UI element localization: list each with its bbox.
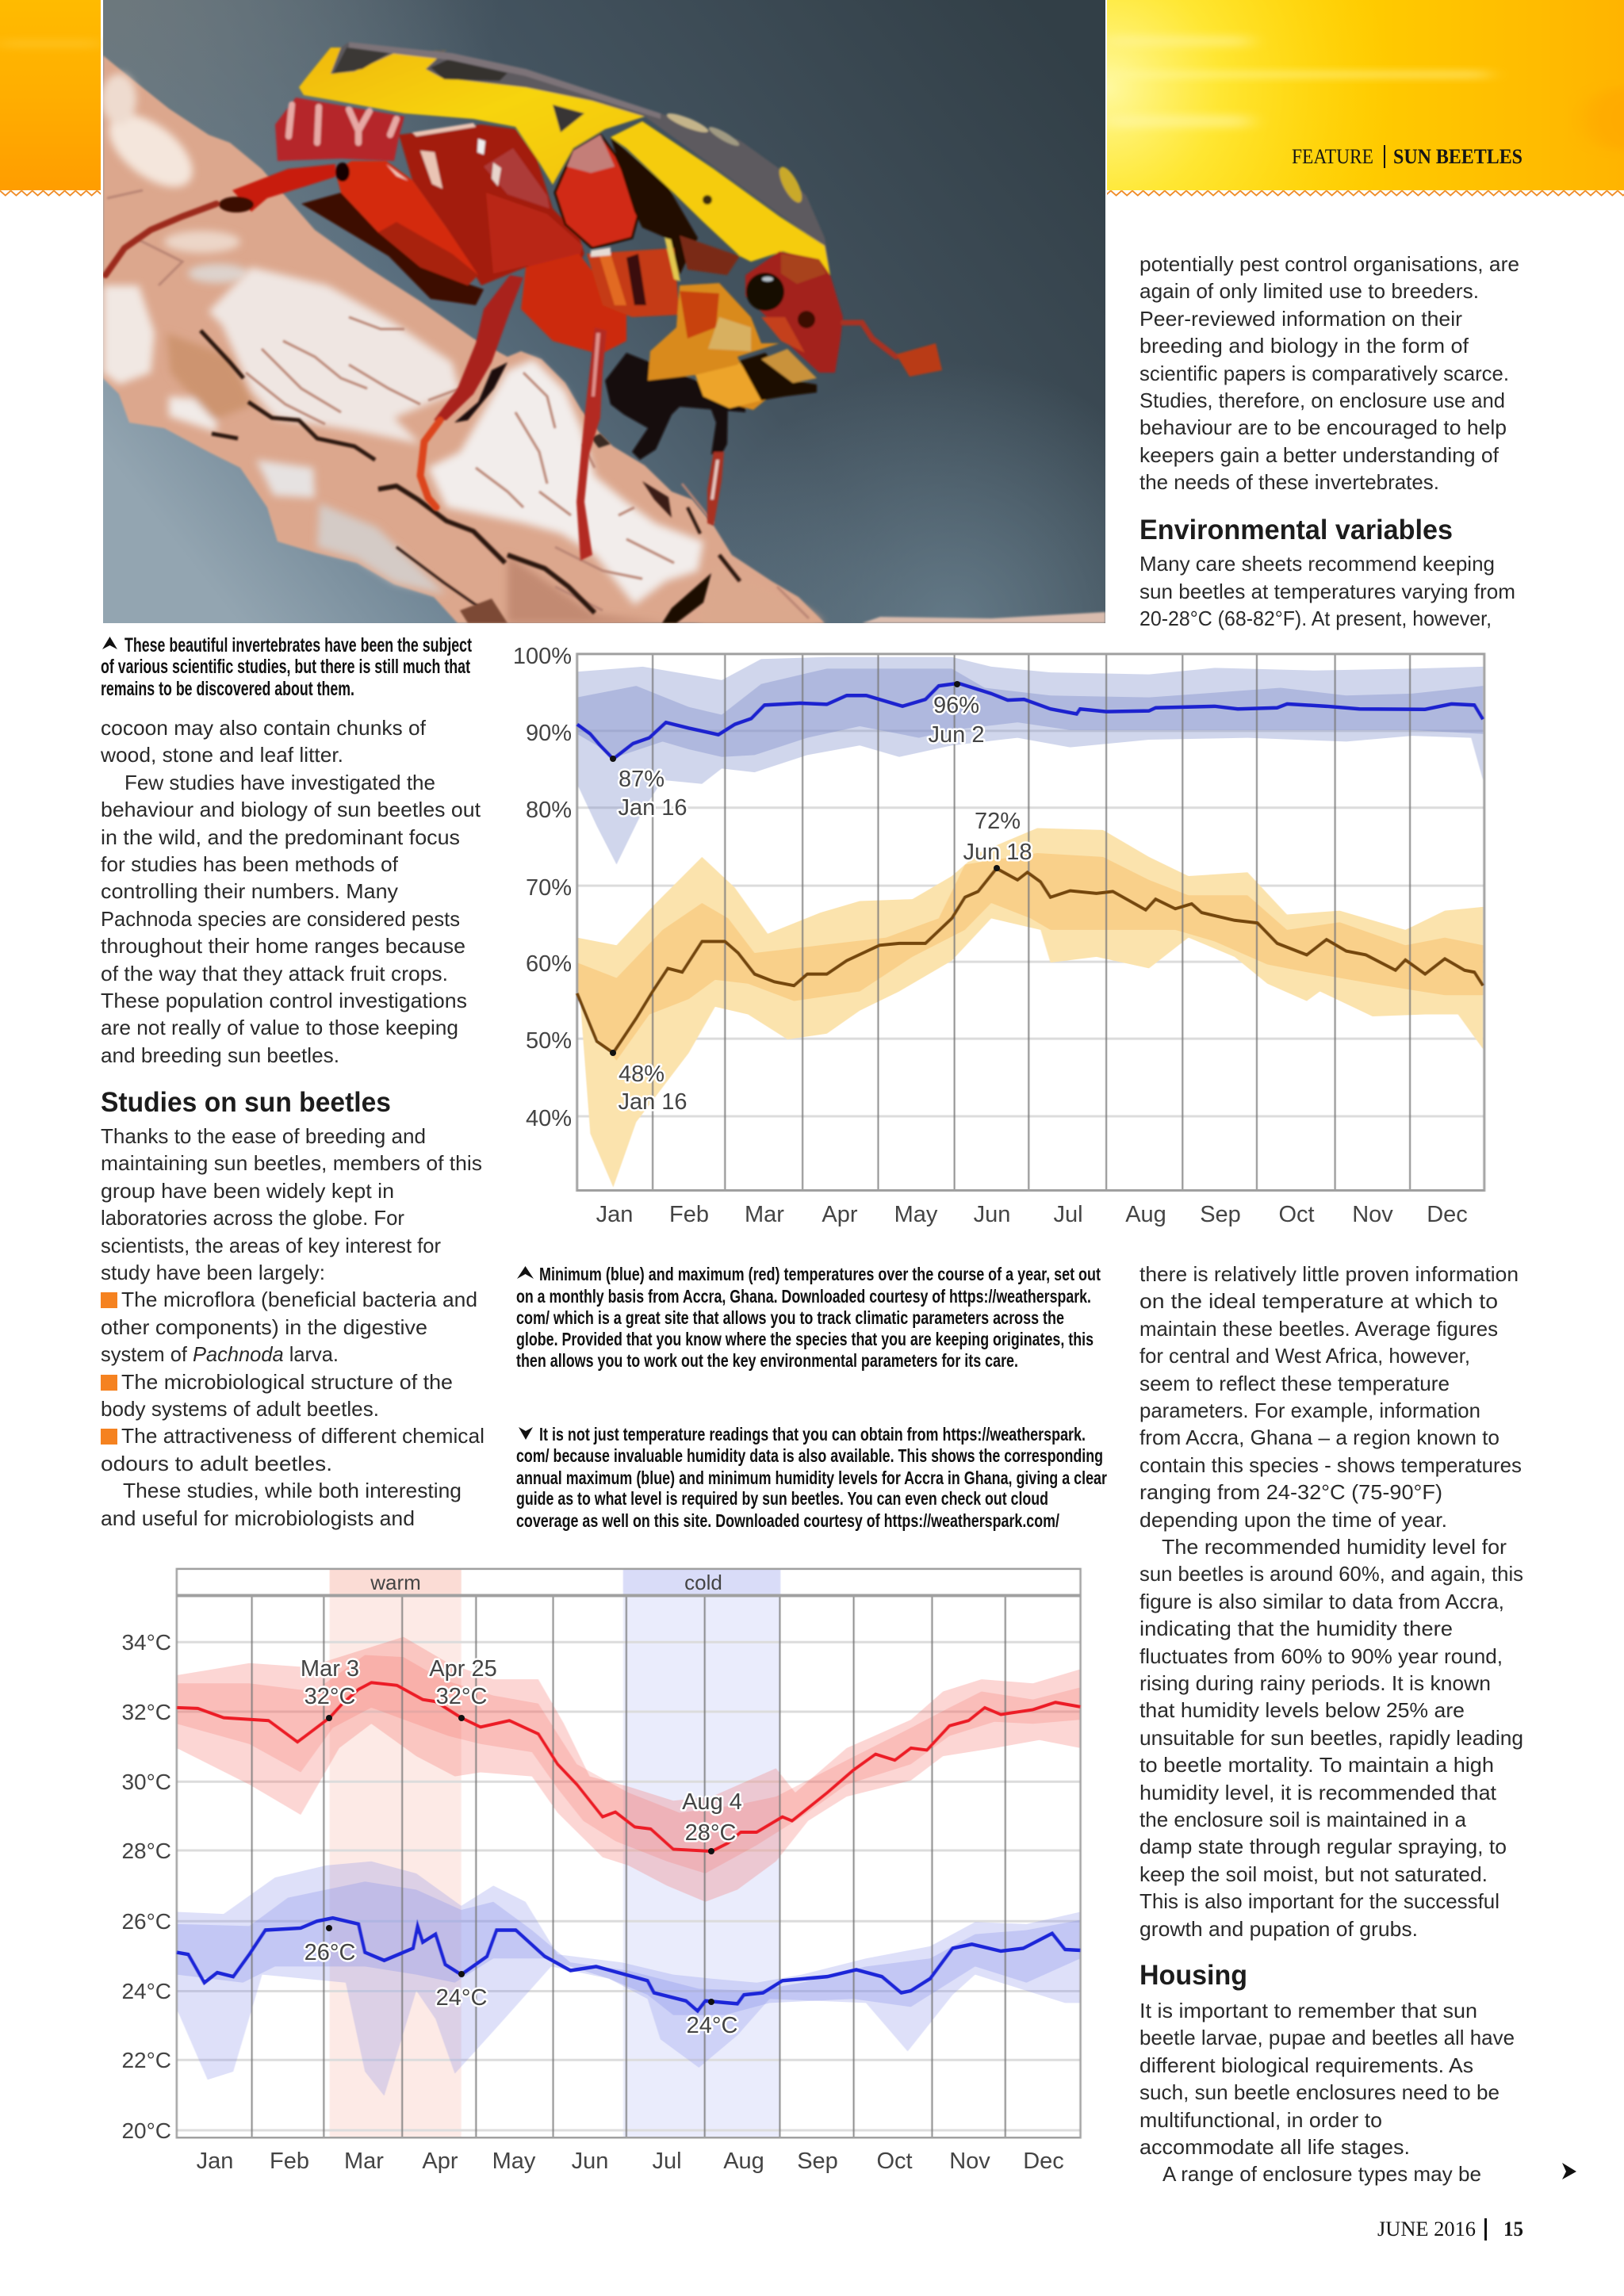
text block: right column, temperature and humidity: This is also important for the successful	[1139, 1889, 1500, 1913]
temperature data labels: 32°C	[304, 1684, 355, 1709]
text block: left column, intro: controlling their numbers. Many	[101, 879, 398, 903]
humidity data labels: 48%	[619, 1062, 665, 1087]
text block: left column, intro: in the wild, and the predominant focus	[101, 825, 460, 849]
text block: right column, temperature and humidity: keep the soil moist, but not saturated.	[1139, 1862, 1488, 1886]
header label: feature, sun beetles: FEATURE	[1292, 145, 1373, 168]
hind leg	[105, 163, 350, 275]
temperature month labels: Apr	[422, 2149, 458, 2174]
caption: minimum and maximum temperatures: then allows you to work out the key environmental parameters for its care.	[516, 1350, 1018, 1371]
caption: beautiful invertebrates: remains to be discovered about them.	[101, 678, 354, 700]
humidity month labels: May	[894, 1202, 938, 1227]
humidity month labels: Nov	[1352, 1202, 1393, 1227]
text block: left column, intro: behaviour and biology of sun beetles out	[101, 798, 481, 821]
humidity month labels: Jan	[596, 1202, 633, 1227]
heading: studies on sun beetles: Studies on sun beetles	[101, 1087, 391, 1118]
warm and cold season labels	[370, 1571, 722, 1594]
humidity month labels: Dec	[1427, 1202, 1468, 1227]
chart: humidity over the year, Accra	[513, 644, 1484, 1227]
temperature data labels: Mar 3	[301, 1656, 359, 1682]
warm and cold season labels: warm	[370, 1571, 421, 1594]
text block: left column, intro: These population control investigations	[101, 989, 467, 1012]
text block: left column, intro: throughout their home ranges because	[101, 934, 465, 958]
text block: environmental variables intro	[1139, 552, 1515, 630]
humidity month labels: Jun	[974, 1202, 1010, 1227]
humidity month labels: Sep	[1200, 1202, 1241, 1227]
humidity data labels: 72%	[975, 809, 1021, 834]
caption: humidity data: It is not just temperature readings that you can obtain from https://weatherspark.	[539, 1424, 1086, 1445]
text block: right column, top: again of only limited use to breeders.	[1139, 279, 1479, 303]
temperature month labels: Jul	[652, 2149, 682, 2174]
humidity month labels: Apr	[822, 1202, 858, 1227]
warm season band	[330, 1569, 462, 2137]
caption: humidity data: coverage as well on this site. Downloaded courtesy of https://weatherspark.com/	[516, 1510, 1059, 1531]
text block: left column, intro: Pachnoda species are considered pests	[101, 907, 460, 931]
temperature y axis labels: 26°C	[121, 1909, 171, 1934]
text block: environmental variables intro: sun beetles at temperatures varying from	[1139, 580, 1515, 603]
text block: right column, temperature and humidity: rising during rainy periods. It is known	[1139, 1671, 1491, 1695]
text block: left column, intro: wood, stone and leaf litter.	[100, 743, 343, 767]
text block: right column, temperature and humidity: from Accra, Ghana – a region known to	[1139, 1425, 1500, 1449]
red temperature bands	[177, 1637, 1081, 1902]
dark gap under elytron	[611, 137, 698, 275]
text block: studies on sun beetles: other components) in the digestive	[101, 1315, 427, 1339]
humidity y axis labels: 40%	[526, 1106, 572, 1131]
blue humidity bands	[577, 657, 1483, 865]
footer: date and page number: 15	[1503, 2218, 1523, 2241]
text block: studies on sun beetles: system of Pachnoda larva.	[101, 1342, 339, 1366]
caption: beautiful invertebrates	[101, 634, 472, 700]
abdomen segments	[275, 98, 404, 161]
caption: humidity data: guide as to what level is required by sun beetles. You can even check out cloud	[516, 1488, 1048, 1509]
temperature data labels: Aug 4	[682, 1789, 742, 1815]
humidity month labels	[596, 1202, 1468, 1227]
temperature data labels: Apr 25	[429, 1656, 497, 1682]
caption: minimum and maximum temperatures: on a monthly basis from Accra, Ghana. Downloaded courtesy of https://weatherspark.	[516, 1286, 1091, 1307]
temperature y axis labels: 34°C	[121, 1630, 171, 1655]
text block: housing: multifunctional, in order to	[1139, 2108, 1382, 2132]
temperature month labels: Dec	[1023, 2149, 1064, 2174]
text block: right column, top: Peer-reviewed information on their	[1139, 307, 1462, 331]
text block: right column, temperature and humidity: to beetle mortality. To maintain a high	[1139, 1753, 1494, 1777]
humidity data labels: 87%	[619, 767, 665, 792]
text block: right column, temperature and humidity: contain this species - shows temperatures	[1139, 1453, 1522, 1477]
caption: beautiful invertebrates: of various scientific studies, but there is still much that	[101, 656, 470, 678]
text block: left column, intro: cocoon may also contain chunks of	[101, 716, 427, 740]
text block: right column, temperature and humidity: fluctuates from 60% to 90% year round,	[1139, 1644, 1503, 1668]
humidity y axis labels: 60%	[526, 951, 572, 977]
text block: housing: beetle larvae, pupae and beetles all have	[1139, 2026, 1515, 2049]
yellow elytron edge	[611, 121, 830, 275]
footer: date and page number	[1377, 2218, 1523, 2241]
text block: right column, temperature and humidity	[1139, 1262, 1523, 1941]
text block: housing: accommodate all life stages.	[1139, 2135, 1410, 2159]
text block: right column, top: keepers gain a better understanding of	[1139, 443, 1500, 467]
temperature y axis labels: 30°C	[121, 1770, 171, 1794]
text block: right column, temperature and humidity: maintain these beetles. Average figures	[1139, 1317, 1498, 1341]
humidity y axis labels: 80%	[526, 798, 572, 823]
humidity data labels	[618, 693, 1032, 1115]
temperature month labels: Jan	[197, 2149, 233, 2174]
caption: minimum and maximum temperatures: com/ which is a great site that allows you to track climatic parameters across the	[516, 1307, 1064, 1328]
white bark patches	[209, 267, 460, 444]
text block: right column, temperature and humidity: parameters. For example, information	[1139, 1399, 1480, 1422]
text block: right column, temperature and humidity: growth and pupation of grubs.	[1139, 1917, 1418, 1941]
text block: right column, temperature and humidity: seem to reflect these temperature	[1139, 1372, 1450, 1395]
temperature y axis labels: 20°C	[121, 2118, 171, 2143]
temperature month labels: Nov	[949, 2149, 990, 2174]
text block: right column, temperature and humidity: The recommended humidity level for	[1162, 1535, 1507, 1559]
humidity month labels: Mar	[745, 1202, 784, 1227]
temperature y axis labels	[121, 1630, 171, 2143]
text block: left column, intro: of the way that they attack fruit crops.	[101, 962, 448, 985]
text block: studies on sun beetles	[101, 1124, 485, 1530]
text block: right column, temperature and humidity: damp state through regular spraying, to	[1139, 1835, 1507, 1858]
photo: sun beetle on a branch	[96, 0, 1105, 623]
humidity data labels: Jun 2	[929, 722, 984, 748]
lower thorax	[521, 254, 626, 354]
text block: right column, temperature and humidity: the enclosure soil is maintained in a	[1139, 1808, 1467, 1831]
yellow pronotum	[299, 48, 645, 185]
temperature data labels: 24°C	[436, 1985, 487, 2011]
header band: left	[0, 0, 101, 197]
text block: housing: A range of enclosure types may be	[1162, 2162, 1481, 2186]
text block: studies on sun beetles: Thanks to the ease of breeding and	[101, 1124, 426, 1148]
text block: right column, temperature and humidity: figure is also similar to data from Accra,	[1139, 1590, 1504, 1613]
header band: right	[1107, 0, 1624, 197]
text block: right column, top: potentially pest control organisations, are	[1139, 252, 1519, 276]
temperature month labels: Sep	[797, 2149, 838, 2174]
hair	[648, 283, 817, 410]
text block: right column, top: behaviour are to be encouraged to help	[1139, 415, 1507, 439]
caption: humidity data	[516, 1424, 1107, 1531]
temperature y axis labels: 22°C	[121, 2048, 171, 2072]
humidity month labels: Aug	[1125, 1202, 1166, 1227]
bark cracks	[107, 190, 809, 618]
minimum temperature line	[177, 1918, 1081, 2011]
footer: date and page number: JUNE 2016	[1377, 2218, 1476, 2241]
text block: right column, temperature and humidity: sun beetles is around 60%, and again, this	[1139, 1562, 1523, 1586]
text block: studies on sun beetles: The microflora (beneficial bacteria and	[121, 1288, 477, 1311]
maximum temperature line	[177, 1682, 1081, 1851]
text block: right column, top: scientific papers is comparatively scarce.	[1139, 362, 1509, 385]
temperature month labels: Mar	[344, 2149, 384, 2174]
head	[745, 251, 843, 373]
text block: right column, temperature and humidity: for central and West Africa, however,	[1139, 1344, 1470, 1368]
text block: housing: It is important to remember that sun	[1139, 1999, 1477, 2022]
chart: temperature over the year, Accra	[121, 1569, 1081, 2174]
text block: right column, temperature and humidity: ranging from 24-32°C (75-90°F)	[1139, 1480, 1442, 1504]
text block: studies on sun beetles: and useful for microbiologists and	[101, 1506, 415, 1530]
text block: studies on sun beetles: maintaining sun beetles, members of this	[101, 1151, 482, 1175]
temperature y axis labels: 28°C	[121, 1839, 171, 1863]
humidity data labels: Jan 16	[618, 795, 688, 821]
heading: environmental variables: Environmental variables	[1139, 515, 1453, 545]
temperature month labels: May	[492, 2149, 536, 2174]
humidity data labels: Jan 16	[618, 1089, 688, 1115]
icon: continue arrow	[1562, 2163, 1576, 2179]
beetle	[105, 42, 942, 561]
maximum humidity line	[577, 683, 1483, 759]
text block: right column, temperature and humidity: humidity level, it is recommended that	[1139, 1781, 1497, 1804]
temperature y axis labels: 32°C	[121, 1700, 171, 1724]
temperature month labels	[197, 2149, 1064, 2174]
temperature data labels: 28°C	[685, 1820, 736, 1846]
dark red thorax side	[399, 124, 584, 285]
caption: humidity data: com/ because invaluable humidity data is also available. This shows the corresponding	[516, 1445, 1103, 1466]
text block: right column, temperature and humidity: unsuitable for sun beetles, rapidly leading	[1139, 1726, 1523, 1750]
temperature data labels: 32°C	[436, 1684, 487, 1709]
orange humidity bands	[577, 828, 1483, 1188]
text block: studies on sun beetles: laboratories across the globe. For	[101, 1206, 404, 1230]
text block: left column, intro: for studies has been methods of	[101, 852, 399, 876]
temperature y axis labels: 24°C	[121, 1979, 171, 2003]
text block: housing	[1139, 1999, 1515, 2186]
temperature data labels: 26°C	[304, 1940, 355, 1965]
text block: housing: such, sun beetle enclosures need to be	[1139, 2080, 1500, 2104]
dark elytra	[331, 42, 830, 272]
humidity y axis labels: 50%	[526, 1028, 572, 1054]
text block: right column, temperature and humidity: depending upon the time of year.	[1139, 1508, 1447, 1532]
caption: humidity data: annual maximum (blue) and minimum humidity levels for Accra in Ghana, giving a clear	[516, 1468, 1107, 1488]
round coxa	[555, 135, 640, 248]
temperature data labels	[301, 1656, 742, 2038]
text block: right column, top: breeding and biology in the form of	[1139, 334, 1469, 358]
caption: minimum and maximum temperatures	[516, 1264, 1101, 1371]
text block: left column, intro	[100, 716, 481, 1067]
text block: right column, temperature and humidity: indicating that the humidity there	[1139, 1617, 1453, 1640]
caption: minimum and maximum temperatures: Minimum (blue) and maximum (red) temperatures over the course of a year, set out	[539, 1264, 1101, 1284]
text block: right column, top	[1139, 252, 1519, 494]
temperature month labels: Jun	[572, 2149, 608, 2174]
humidity month labels: Jul	[1053, 1202, 1083, 1227]
caption: minimum and maximum temperatures: globe. Provided that you know where the species that you are keeping originates, this	[516, 1329, 1094, 1349]
text block: left column, intro: Few studies have investigated the	[124, 771, 435, 794]
antenna	[843, 323, 942, 377]
text block: studies on sun beetles: The attractiveness of different chemical	[121, 1424, 485, 1448]
text block: right column, temperature and humidity: on the ideal temperature at which to	[1139, 1289, 1498, 1313]
text block: right column, temperature and humidity: that humidity levels below 25% are	[1139, 1698, 1465, 1722]
warm and cold season labels: cold	[684, 1571, 722, 1594]
text block: left column, intro: and breeding sun beetles.	[101, 1043, 339, 1067]
blue temperature bands	[177, 1862, 1081, 2096]
text block: environmental variables intro: Many care sheets recommend keeping	[1139, 552, 1495, 576]
front leg	[576, 327, 607, 561]
text block: studies on sun beetles: These studies, while both interesting	[123, 1479, 462, 1502]
text block: studies on sun beetles: scientists, the areas of key interest for	[101, 1234, 441, 1257]
humidity y axis labels: 90%	[526, 721, 572, 746]
mid leg	[420, 275, 523, 507]
humidity y axis labels	[513, 644, 572, 1131]
text block: environmental variables intro: 20-28°C (68-82°F). At present, however,	[1139, 607, 1492, 630]
temperature month labels: Oct	[876, 2149, 913, 2174]
cold season band	[623, 1569, 780, 2137]
heading: housing: Housing	[1139, 1960, 1247, 1991]
text block: studies on sun beetles: group have been widely kept in	[101, 1179, 394, 1203]
humidity month labels: Feb	[669, 1202, 709, 1227]
temperature month labels: Feb	[270, 2149, 309, 2174]
text block: studies on sun beetles: body systems of adult beetles.	[101, 1397, 379, 1421]
temperature data labels: 24°C	[687, 2013, 737, 2038]
text block: right column, temperature and humidity: there is relatively little proven information	[1139, 1262, 1519, 1286]
header label: feature, sun beetles: SUN BEETLES	[1393, 145, 1522, 168]
text block: left column, intro: are not really of value to those keeping	[101, 1016, 458, 1039]
humidity y axis labels: 100%	[513, 644, 572, 669]
text block: studies on sun beetles: study have been largely:	[101, 1261, 325, 1284]
header label: feature, sun beetles	[1292, 145, 1522, 168]
text block: studies on sun beetles: odours to adult beetles.	[101, 1452, 332, 1475]
humidity data labels: 96%	[933, 693, 979, 718]
caption: beautiful invertebrates: These beautiful invertebrates have been the subject	[124, 634, 472, 656]
temperature month labels: Aug	[723, 2149, 764, 2174]
dark undersides and far legs	[301, 193, 745, 526]
hind femur	[335, 161, 478, 285]
humidity y axis labels: 70%	[526, 875, 572, 901]
text block: right column, top: the needs of these invertebrates.	[1139, 470, 1439, 494]
text block: studies on sun beetles: The microbiological structure of the	[121, 1370, 453, 1394]
branch	[96, 55, 1105, 623]
humidity month labels: Oct	[1278, 1202, 1315, 1227]
minimum humidity line	[577, 868, 1483, 1053]
text block: housing: different biological requirements. As	[1139, 2053, 1473, 2077]
text block: right column, top: Studies, therefore, on enclosure use and	[1139, 388, 1505, 412]
humidity data labels: Jun 18	[963, 840, 1032, 865]
